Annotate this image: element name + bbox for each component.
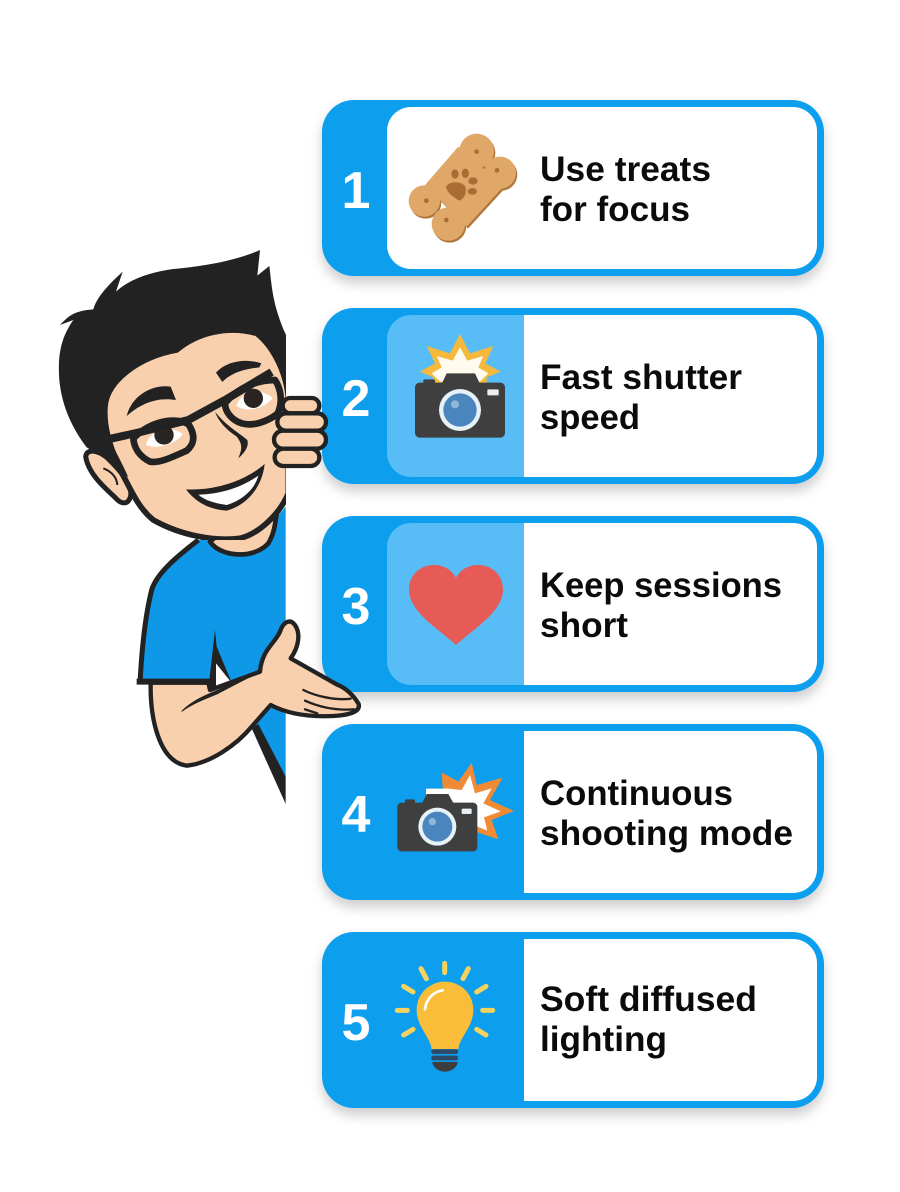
face — [105, 330, 288, 539]
text: soft diffused lighting: Soft diffused — [540, 980, 757, 1019]
icon: light bulb — [397, 963, 493, 1072]
card 1: use treats — [322, 100, 824, 276]
text: continuous shooting mode: shooting mode — [540, 814, 793, 853]
eyes — [146, 389, 273, 447]
character peeking from behind edge — [59, 250, 359, 804]
smile — [186, 464, 265, 511]
hair — [59, 250, 286, 477]
card 3: keep sessions short — [322, 516, 824, 692]
step number 5: 5 — [342, 994, 370, 1052]
card 2: fast shutter speed — [322, 308, 824, 484]
text: fast shutter speed: Fast shutter — [540, 358, 742, 397]
icon: heart — [409, 565, 503, 645]
nose — [215, 412, 248, 458]
step number 3: 3 — [342, 578, 370, 636]
character body and gesturing arm — [137, 507, 359, 804]
text: keep sessions short — [540, 566, 782, 645]
card 5: soft diffused lighting — [322, 932, 824, 1108]
character head with glasses and smile — [59, 250, 326, 539]
ear — [86, 451, 131, 503]
text: soft diffused lighting: lighting — [540, 1020, 667, 1059]
text: use treats for focus: for focus — [540, 190, 690, 229]
card 4: continuous shooting mode — [322, 724, 824, 900]
step number 1: 1 — [342, 162, 370, 220]
text: fast shutter speed — [540, 358, 742, 437]
text: keep sessions short: short — [540, 606, 628, 645]
text: use treats for focus: Use treats — [540, 150, 711, 189]
text: continuous shooting mode: Continuous — [540, 774, 733, 813]
text: keep sessions short: Keep sessions — [540, 566, 782, 605]
fingers — [274, 398, 326, 466]
icon: camera with flash — [415, 334, 505, 438]
text: use treats for focus — [540, 150, 711, 229]
icon: dog biscuit — [409, 134, 517, 243]
glasses — [111, 372, 281, 462]
step number 4: 4 — [342, 786, 371, 844]
step number 2: 2 — [342, 370, 370, 428]
text: soft diffused lighting — [540, 980, 757, 1059]
text: fast shutter speed: speed — [540, 398, 640, 437]
text: continuous shooting mode — [540, 774, 793, 853]
icon: camera with orange burst — [397, 763, 514, 851]
eyebrows — [127, 361, 261, 416]
